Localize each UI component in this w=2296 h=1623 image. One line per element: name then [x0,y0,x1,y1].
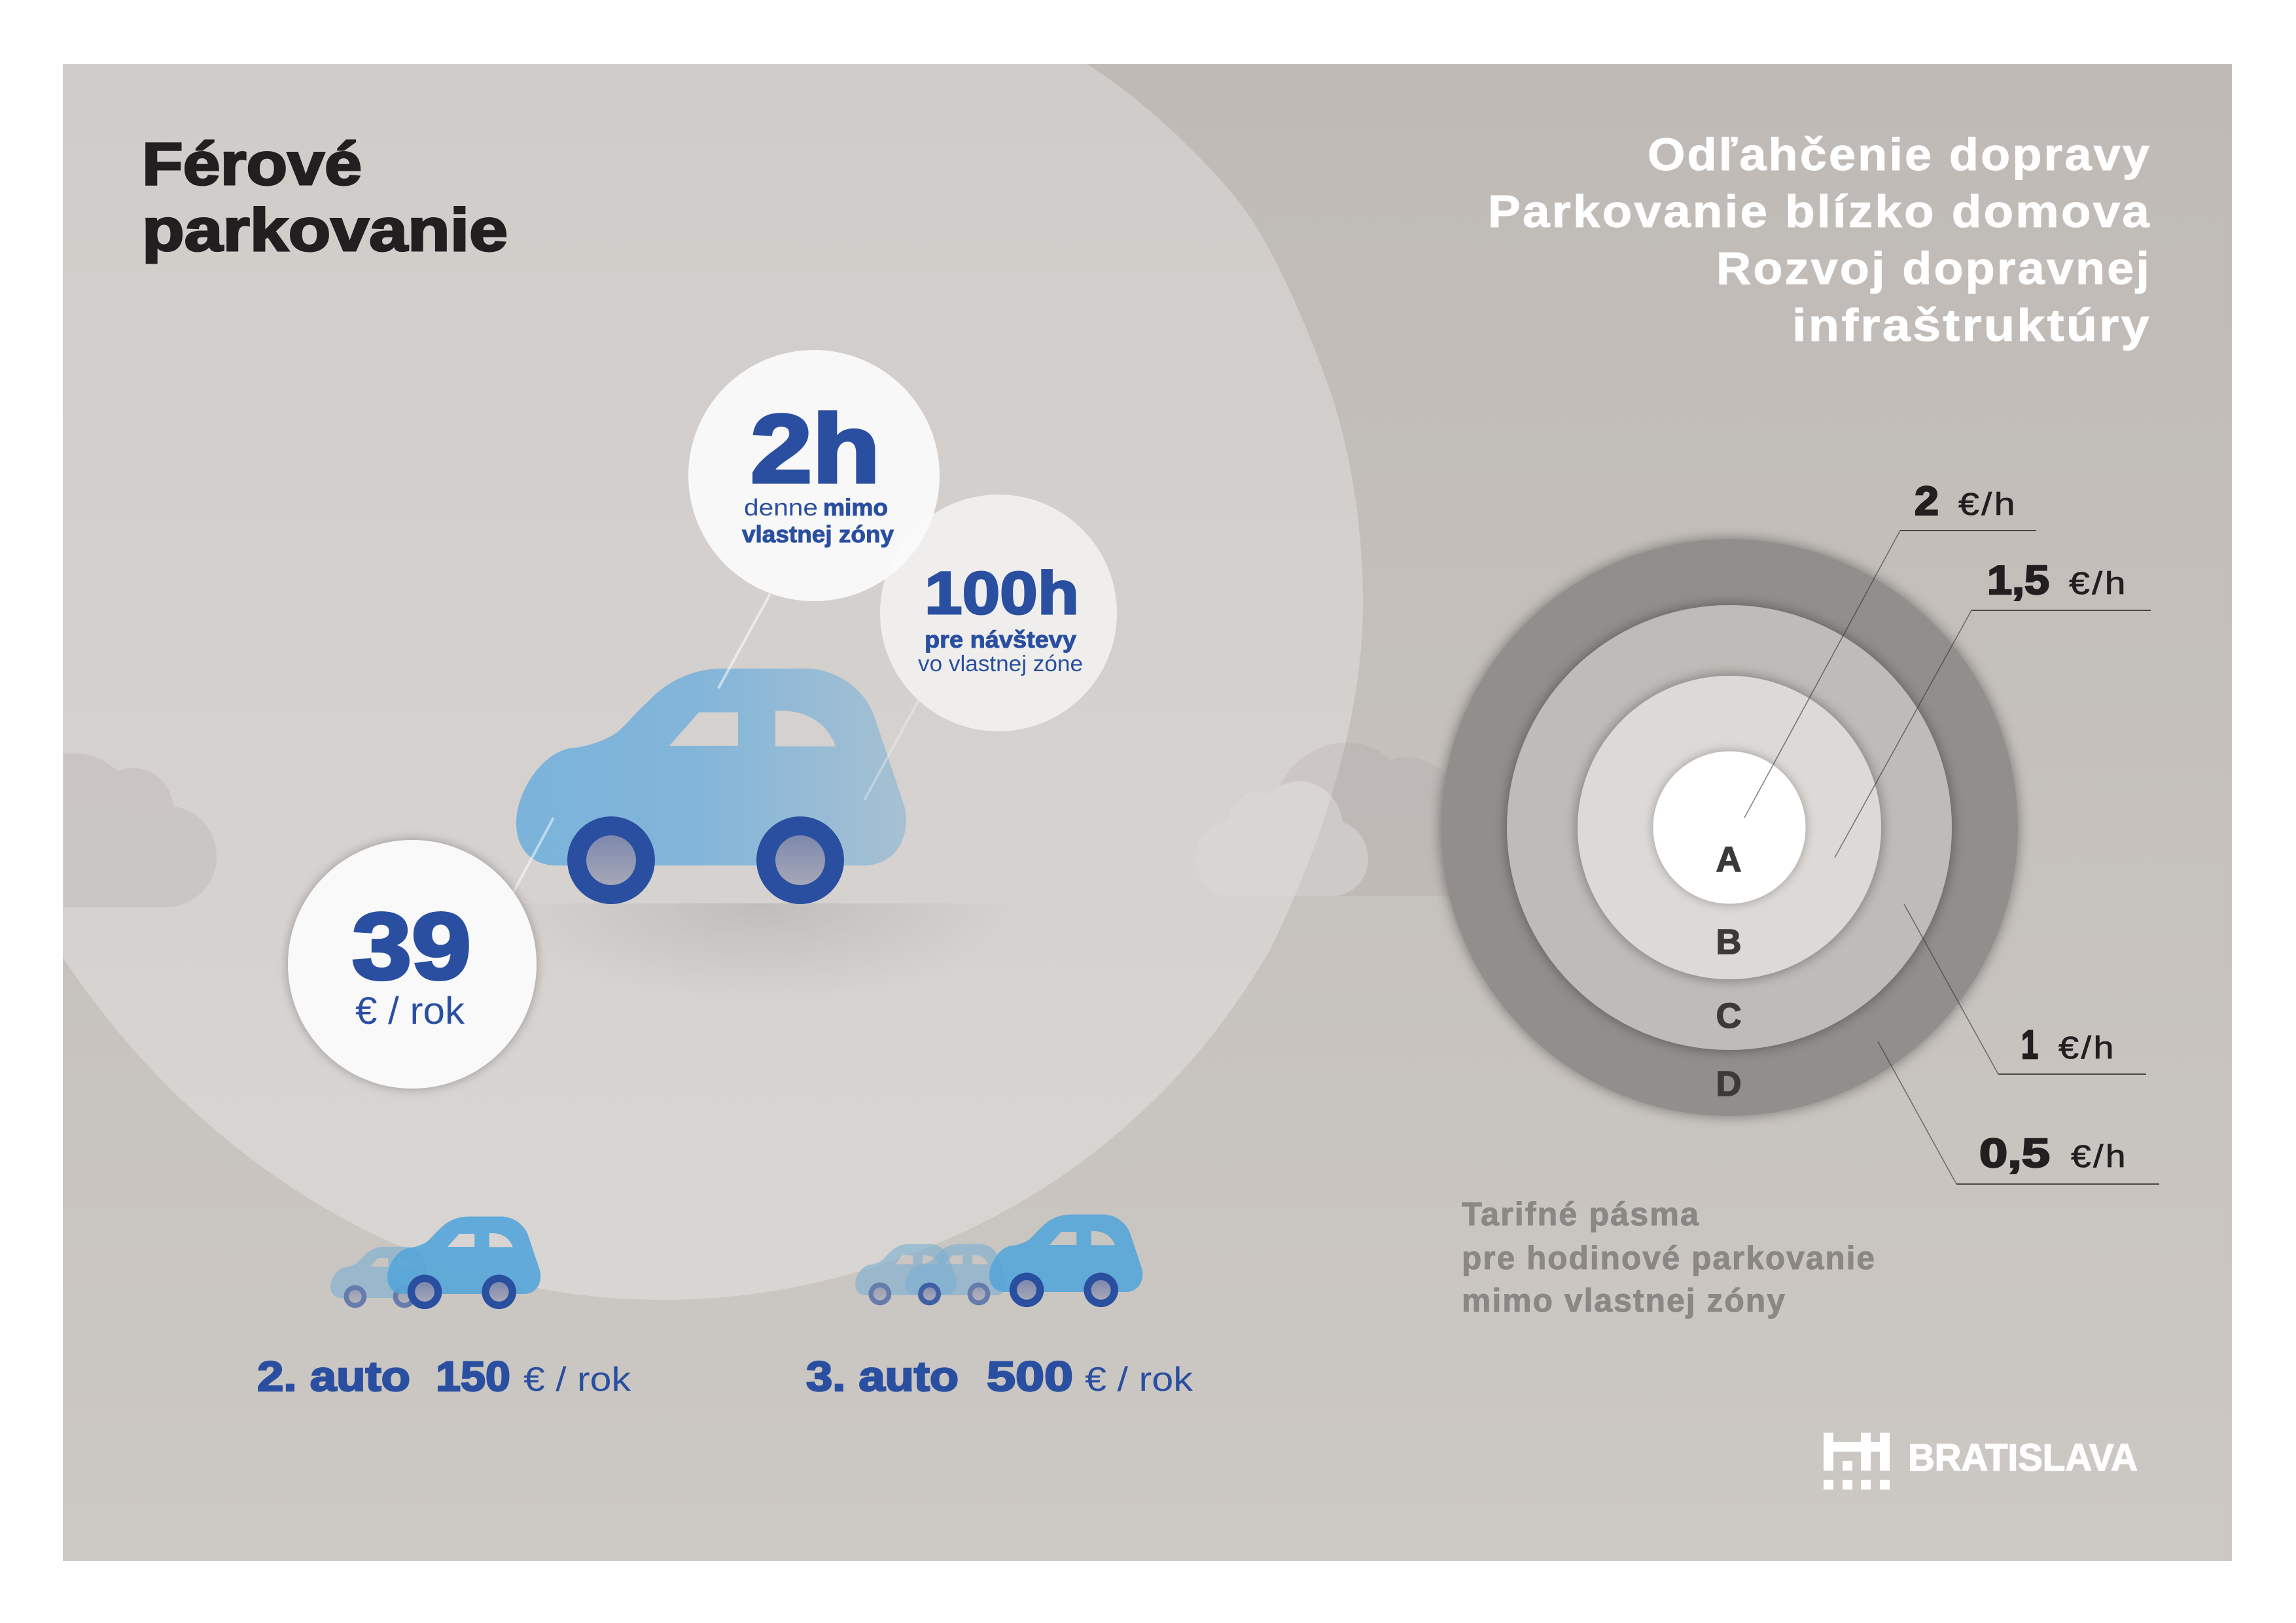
price: zone C [2021,1022,2116,1068]
callout: 39 € / rok: 39 [352,894,471,999]
callout: 39 € / rok: € / rok [355,990,465,1032]
callout: 2h: denne [744,494,818,521]
callout: 2h: 2h [751,395,880,503]
callout: 100h: vo vlastnej zóne [918,652,1083,676]
label: third car price: 3. auto [806,1353,959,1400]
price: zone D [1979,1131,2128,1176]
price: zone C: €/h [2058,1031,2116,1066]
back car two [905,1244,1006,1305]
price: zone D: 0,5 [1979,1131,2050,1176]
back car faded [330,1247,432,1308]
chart: tariff zones [1441,479,2159,1184]
callout: 100h [880,495,1117,731]
text block: tariff zones caption: Tarifné pásma [1462,1196,1700,1232]
text block: tariff zones caption [1462,1196,1876,1319]
price: zone B: €/h [2069,567,2128,601]
zone A centre [1653,751,1806,904]
logo mark [1824,1433,1890,1490]
icon: third car group [855,1215,1142,1307]
callout: 2h: mimo [823,494,888,521]
zone D ring [1441,539,2018,1116]
price: zone A: €/h [1958,487,2017,522]
heading: goals: infraštruktúry [1792,300,2151,351]
callout: 2h: vlastnej zóny [742,521,894,548]
label: second car price: 2. auto [257,1353,410,1400]
text block: tariff zones caption: pre hodinové parkovanie [1462,1240,1876,1276]
heading: goals [1488,129,2151,351]
wheels [567,816,844,904]
ground shadow under car [497,903,1024,1100]
label: second car price: € / rok [523,1361,631,1399]
callout: 39 € / rok [288,840,537,1089]
zone letters [1716,840,1742,1104]
title: Férové [142,131,362,198]
icon: right background cloud [1280,743,1345,795]
logo: Bratislava [1824,1433,2138,1490]
heading: goals: Rozvoj dopravnej [1716,243,2151,294]
price: zone D: €/h [2071,1140,2128,1174]
car body [516,669,906,865]
callout: 100h: pre návštevy [925,626,1076,653]
front car [989,1215,1142,1307]
label: third car price [806,1353,1193,1400]
price: zone B [1987,558,2128,603]
icon: left cloud [63,754,217,907]
heading: goals: Parkovanie blízko domova [1488,186,2151,237]
zone letters: D [1716,1064,1742,1104]
callout: 2h [688,350,940,601]
label: third car price: 500 [987,1353,1073,1400]
icon: main car [516,669,906,904]
text block: tariff zones caption: mimo vlastnej zóny [1462,1282,1786,1319]
front car [387,1217,540,1309]
leader lines [1744,531,2159,1184]
zone letters: C [1716,996,1742,1036]
label: second car price [257,1353,631,1400]
pointer lines [513,594,919,893]
price: zone A: 2 [1915,479,1939,524]
title [142,131,508,264]
zone letters: A [1716,840,1742,879]
large light circle [63,64,1363,1300]
icon: second car group [330,1217,540,1309]
price: zone B: 1,5 [1987,558,2049,603]
logo wordmark: BRATISLAVA [1908,1437,2138,1479]
title: parkovanie [142,197,508,264]
callout: 100h: 100h [925,560,1079,627]
price: zone C: 1 [2021,1022,2038,1068]
zone C ring [1507,605,1952,1050]
back car one [855,1244,957,1305]
zone letters: B [1716,922,1742,962]
label: third car price: € / rok [1085,1361,1193,1399]
background scene: clouds and large light circle [63,64,1472,1300]
label: second car price: 150 [436,1353,510,1400]
icon: right foreground cloud [1273,781,1368,896]
price: zone A [1915,479,2017,524]
zone B ring [1578,676,1881,979]
heading: goals: Odľahčenie dopravy [1648,129,2151,180]
